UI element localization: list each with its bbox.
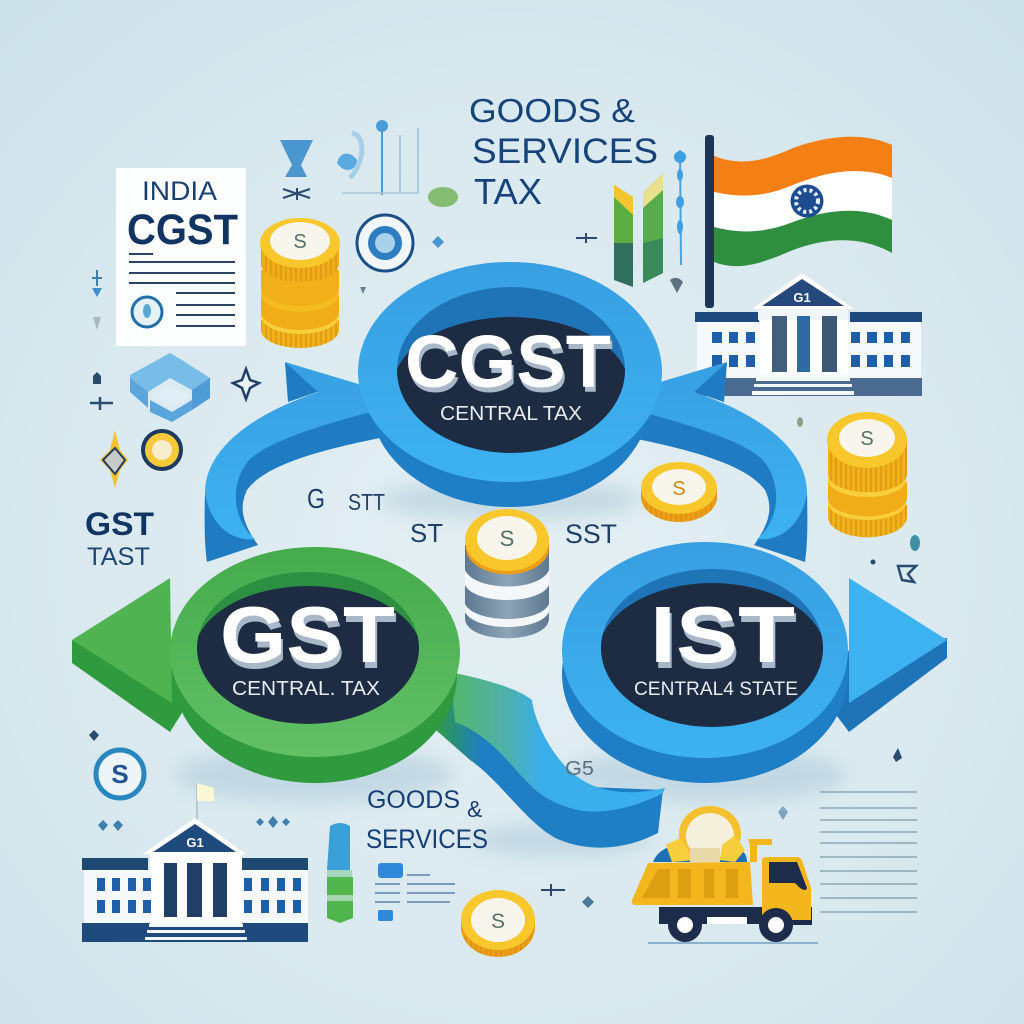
building: bottom left: G1 [186, 835, 204, 850]
label: CGST: CGST [407, 325, 613, 408]
document title [127, 176, 238, 254]
label: CGST: CGST [405, 320, 611, 403]
right curved arrow [632, 362, 807, 562]
heading: goods and services tax: SERVICES [472, 132, 658, 171]
heading: goods and services tax [469, 92, 658, 212]
labels: center abbreviations [307, 483, 617, 780]
labels: center abbreviations: G5 [565, 758, 594, 780]
label: IST: IST [650, 590, 795, 679]
labels: center abbreviations: SST [565, 519, 617, 549]
flow arrow: green ring to blue ring [436, 672, 665, 848]
icons: top small symbols [280, 120, 458, 207]
label: IST: IST [652, 596, 797, 685]
heading: goods and services: SERVICES [366, 824, 488, 854]
label: GST tast: TAST [87, 543, 150, 571]
label: GST: GST [222, 596, 397, 685]
soft shadows under rings [175, 480, 845, 856]
ring: GST with left arrow [72, 547, 460, 783]
heading: goods and services: GOODS [367, 786, 460, 814]
icons: scattered sparkles [89, 233, 920, 908]
coin stack: top left: S [293, 231, 307, 253]
heading: goods and services tax: TAX [474, 171, 542, 212]
icon: dump truck with coins [632, 806, 818, 943]
label: GST tast [85, 506, 154, 571]
coin stack: top left [260, 218, 340, 348]
icon: coin badge [143, 431, 181, 469]
heading: goods and services tax: GOODS & [469, 92, 635, 129]
ring: CGST [358, 262, 662, 507]
coin stack: center [465, 509, 549, 638]
building: top right [695, 273, 922, 396]
document title: CGST [127, 206, 238, 254]
label: central and state: CENTRAL4 STATE [634, 679, 798, 700]
icon: S badge: S [111, 759, 129, 789]
heading: goods and services [366, 786, 488, 854]
label: GST tast: GST [85, 506, 154, 542]
labels: center abbreviations: G [307, 483, 325, 514]
icon: mini list [375, 863, 455, 921]
building: top right: G1 [793, 290, 811, 305]
icon: blue cube knot [130, 353, 210, 422]
label: central tax: CENTRAL TAX [440, 403, 582, 425]
icon: stacked blocks [327, 823, 353, 923]
document: India CGST [116, 168, 246, 346]
coin: bottom: S [491, 910, 505, 933]
icon: green bars top [614, 173, 663, 287]
coin stack: right [827, 412, 907, 537]
building: bottom left [82, 783, 308, 942]
icon: beaded blue line [670, 150, 686, 293]
coin: middle right: S [672, 478, 686, 500]
coin: middle right [641, 462, 717, 522]
label: GST: GST [220, 590, 395, 679]
ring: IST with right arrow [562, 542, 947, 783]
coin: bottom [461, 890, 535, 957]
document title: INDIA [142, 176, 217, 206]
coin stack: center: S [500, 526, 514, 551]
labels: center abbreviations: ST [410, 518, 443, 548]
icon: text lines bottom right [820, 792, 917, 912]
icon: diamond [100, 430, 128, 488]
icon: india flag [705, 135, 892, 308]
labels: center abbreviations: STT [348, 489, 385, 515]
heading: goods and services: & [467, 796, 482, 822]
icon: S badge [96, 750, 144, 798]
icon: target badge [357, 215, 413, 271]
label: central tax: CENTRAL. TAX [232, 678, 380, 700]
left curved arrow [205, 362, 380, 562]
coin stack: right: S [860, 428, 874, 450]
